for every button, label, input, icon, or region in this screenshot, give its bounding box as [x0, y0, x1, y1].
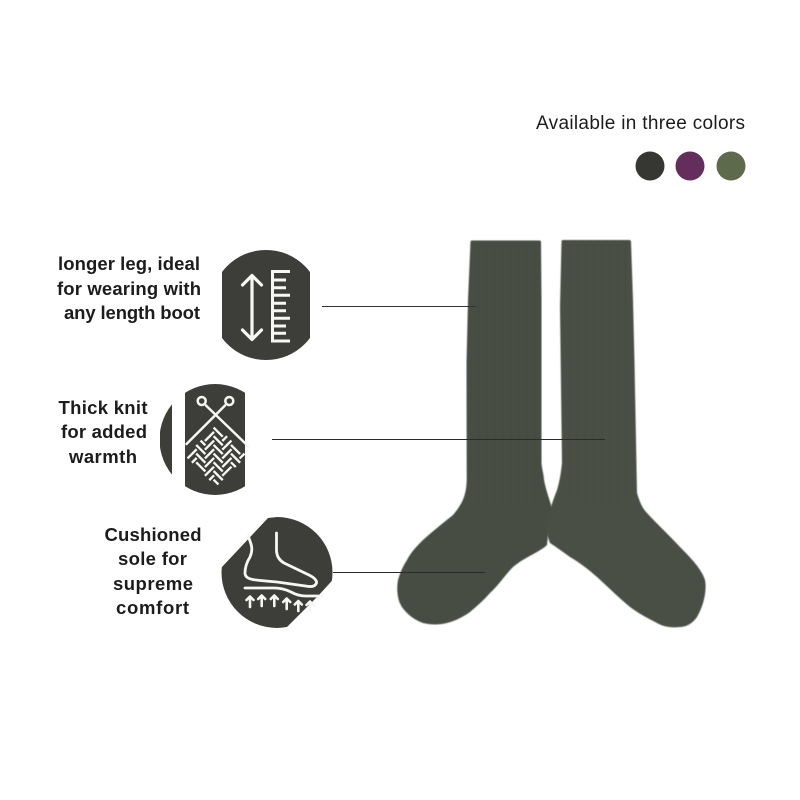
availability heading: Available in three colors: [536, 113, 745, 134]
label: cushioned sole: [104, 524, 202, 618]
socks illustration: [397, 240, 706, 627]
label: thick knit: [58, 397, 148, 467]
leader line: knit: [272, 438, 605, 440]
label: cushioned sole: sole for: [118, 548, 187, 569]
label: longer leg: for wearing with: [57, 278, 201, 299]
icon: foot with arrows: [222, 517, 332, 628]
label: cushioned sole: supreme: [113, 573, 193, 594]
icon: length ruler: [222, 250, 310, 360]
left sock: [397, 240, 552, 624]
label: thick knit: for added: [61, 421, 147, 442]
label: cushioned sole: Cushioned: [104, 524, 202, 545]
leader line: sole: [333, 572, 485, 574]
label: cushioned sole: comfort: [116, 597, 189, 618]
leader line: leg: [322, 306, 476, 308]
colour swatches: [636, 152, 746, 180]
label: longer leg: any length boot: [64, 302, 200, 323]
icon: knitting needles: [160, 384, 249, 495]
label: longer leg: [57, 253, 201, 323]
label: thick knit: Thick knit: [58, 397, 148, 418]
label: longer leg: longer leg, ideal: [58, 253, 200, 274]
label: thick knit: warmth: [68, 446, 137, 467]
right sock: [547, 240, 706, 627]
